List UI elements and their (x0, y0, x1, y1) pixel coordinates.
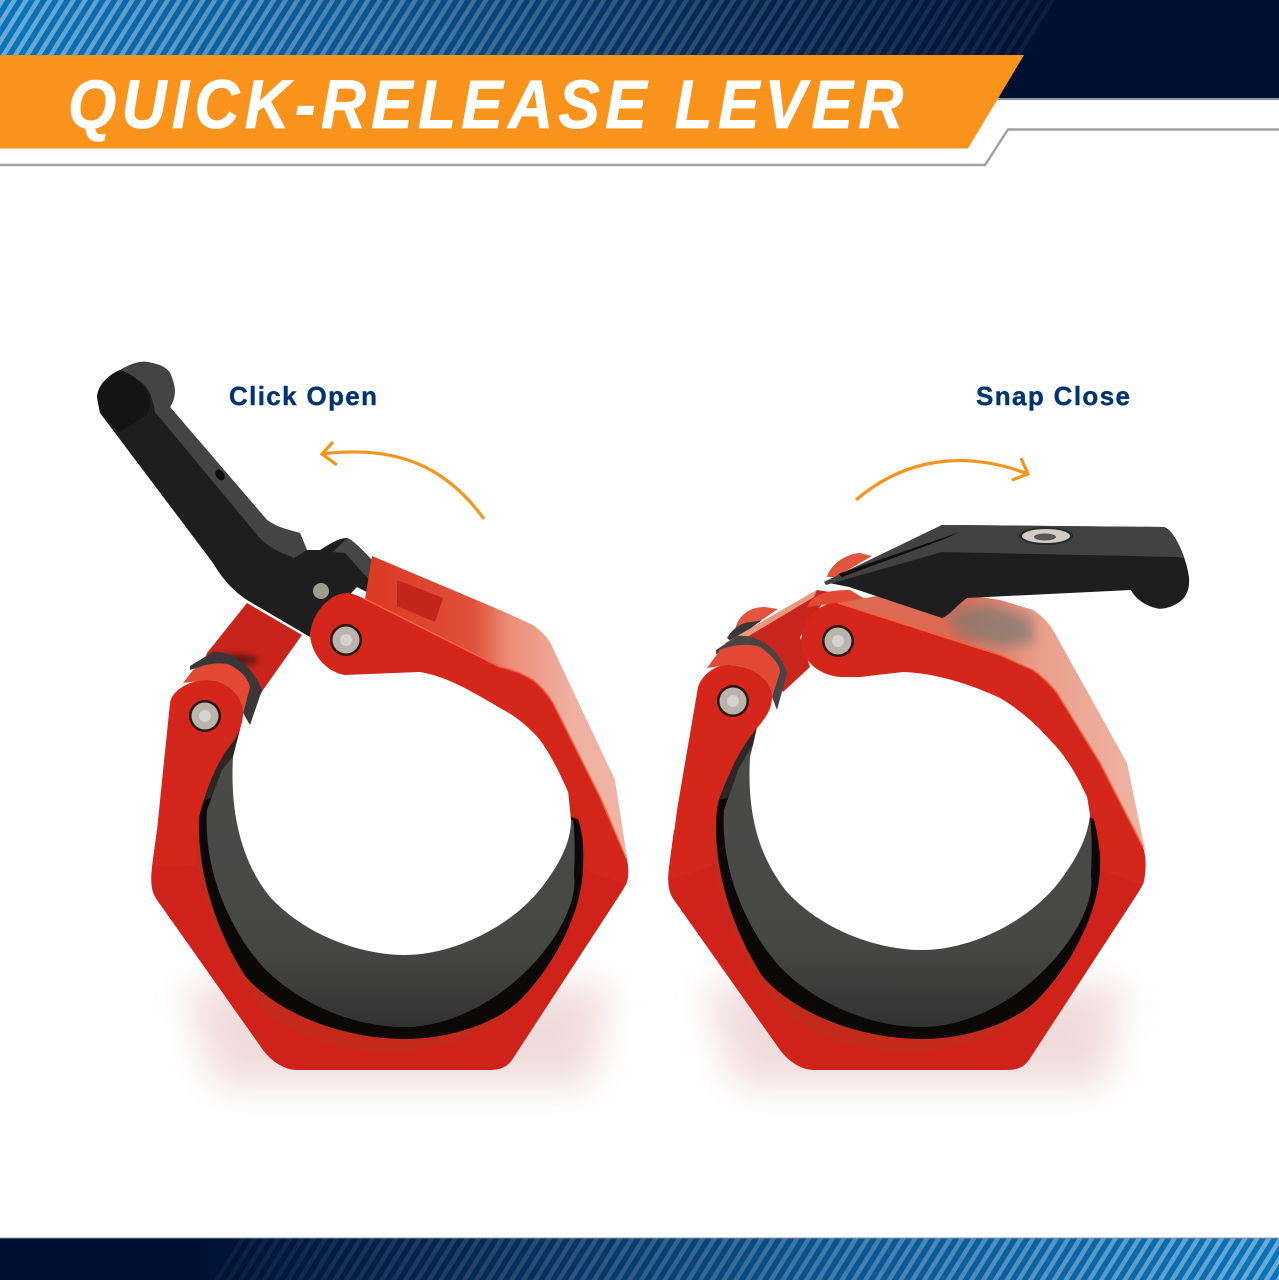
left link plate (200, 603, 302, 705)
right foam liner (724, 748, 1092, 1027)
arrow: click open (322, 442, 484, 519)
right rear bump (735, 607, 778, 630)
left lever (97, 362, 397, 637)
right link plate (725, 590, 830, 692)
header band (0, 0, 1279, 165)
right clamp (668, 525, 1189, 1070)
label: click open: Click Open (229, 381, 377, 411)
arrow: snap close (856, 458, 1028, 500)
left lever pin (313, 583, 329, 599)
right link strip (725, 590, 817, 646)
right front edge highlight (838, 603, 1143, 847)
right black band (716, 760, 1100, 1039)
right rear dark band (727, 620, 762, 642)
right clamp body (668, 700, 1145, 1070)
left slot (397, 580, 443, 622)
title banner (0, 55, 1024, 148)
label: snap close: Snap Close (976, 381, 1130, 411)
left foam liner (207, 755, 575, 1027)
right pin lower (717, 685, 749, 717)
left black band (199, 760, 583, 1039)
left hub cap (183, 663, 250, 713)
left front edge highlight (365, 599, 627, 860)
left pin upper (330, 624, 362, 656)
right lever (824, 525, 1189, 618)
title banner: QUICK-RELEASE LEVER (68, 66, 903, 143)
ground shadows (185, 985, 1125, 1085)
left upper side face (365, 556, 627, 857)
right top red bump (827, 553, 872, 577)
right lower arm (668, 665, 772, 880)
left pin lower (189, 700, 221, 732)
left clamp body (151, 700, 628, 1070)
left dark hinge band (190, 652, 262, 725)
right lever shadow (945, 604, 1035, 648)
right pin upper (822, 625, 854, 657)
right dark liner edge (705, 705, 762, 825)
left clamp (97, 362, 628, 1070)
left upper arm (310, 593, 628, 885)
right upper hub cap (807, 590, 900, 620)
left lower arm (152, 680, 243, 867)
right lever screw (1019, 527, 1073, 545)
right opening (749, 640, 1090, 950)
right side face (838, 588, 1145, 850)
left rim (193, 700, 584, 1052)
right upper arm (801, 603, 1146, 885)
right dark hinge band (716, 636, 787, 710)
right rim (710, 700, 1101, 1052)
right hub cap (707, 645, 780, 697)
left opening (232, 630, 571, 955)
footer band (0, 1238, 1279, 1280)
left dark liner edge (188, 713, 243, 825)
left link shading (214, 654, 258, 666)
